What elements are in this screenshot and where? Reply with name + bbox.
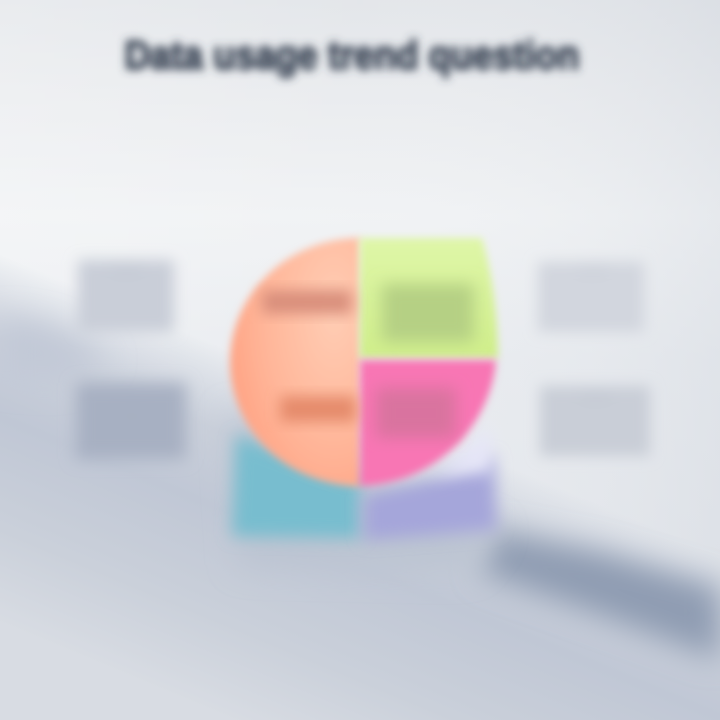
panel: upper right text block	[538, 261, 644, 332]
pink label	[376, 388, 456, 438]
segment: lime	[360, 238, 498, 358]
panel: lower left text block	[76, 383, 186, 459]
panel: lower right text block	[540, 386, 650, 456]
title: Data usage trend question	[124, 32, 580, 78]
light wedge	[436, 426, 492, 476]
chart: pie	[230, 238, 498, 540]
panel: upper right text block: Label	[576, 261, 608, 276]
panel: lower right text block: Label	[579, 387, 611, 402]
segment: teal	[232, 435, 360, 538]
segment: pink	[360, 360, 496, 486]
panel: upper left text block	[78, 260, 174, 332]
segment: lavender	[364, 455, 497, 540]
lower peach label	[280, 396, 356, 422]
panel: upper left text block: Label	[110, 260, 142, 275]
segment: peach	[230, 238, 360, 486]
peach label	[262, 290, 352, 314]
panel: lower left text block: Label	[114, 408, 146, 423]
lime label	[382, 284, 474, 342]
